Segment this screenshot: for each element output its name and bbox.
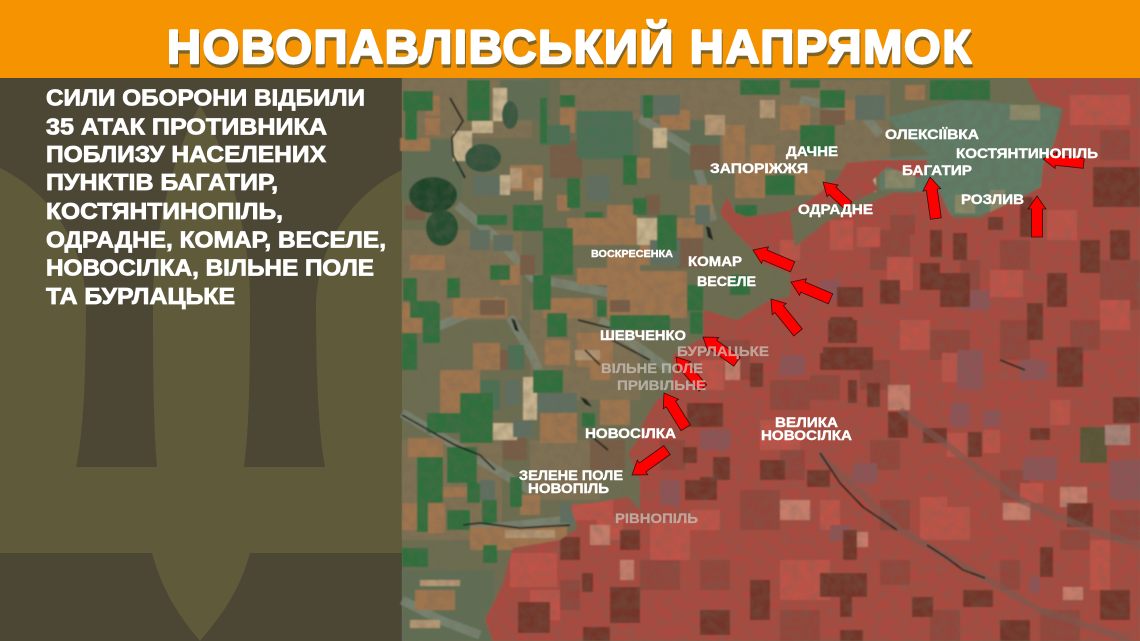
header band <box>0 0 1140 78</box>
icon: trident emblem <box>0 105 402 641</box>
map labels: settlements: КОМАР <box>688 254 742 269</box>
map: Russian-occupied red zone <box>480 78 1140 641</box>
map: rivers and creeks <box>402 98 1025 578</box>
text block: summary: ОДРАДНЕ, КОМАР, ВЕСЕЛЕ, <box>46 226 386 252</box>
title: НОВОПАВЛІВСЬКИЙ НАПРЯМОК <box>167 20 971 73</box>
map labels: settlements: ВЕЛИКА <box>775 415 838 430</box>
text block: summary: 35 АТАК ПРОТИВНИКА <box>46 114 327 140</box>
panel: left text panel with trident emblem <box>0 78 402 641</box>
map labels: greyed settlements: БУРЛАЦЬКЕ <box>677 344 769 359</box>
arrow: Бурлацьке <box>698 330 742 369</box>
map labels: settlements: НОВОСІЛКА <box>585 426 676 441</box>
map labels: settlements: НОВОСІЛКА <box>761 428 852 443</box>
text block: summary: ПУНКТІВ БАГАТИР, <box>46 169 278 195</box>
arrow: Костянтинополь <box>1042 151 1085 171</box>
map labels: settlements: ОЛЕКСІЇВКА <box>885 127 979 142</box>
map: satellite map with frontline <box>400 78 1140 641</box>
arrow: Одрадне <box>818 176 854 212</box>
map labels: greyed settlements: ПРИВІЛЬНЕ <box>617 378 706 393</box>
map labels: settlements: ЗЕЛЕНЕ ПОЛЕ <box>519 468 623 483</box>
map labels: settlements: КОСТЯНТИНОПІЛЬ <box>956 146 1098 161</box>
arrow: Багатир <box>921 176 945 220</box>
text block: summary: НОВОСІЛКА, ВІЛЬНЕ ПОЛЕ <box>46 254 374 280</box>
arrow: Привільне <box>656 388 693 433</box>
arrow: south of Веселе <box>764 293 805 338</box>
text block: summary: КОСТЯНТИНОПІЛЬ, <box>46 198 283 224</box>
arrow: Розлив <box>1028 196 1046 237</box>
map labels: settlements: ЗАПОРІЖЖЯ <box>710 161 808 176</box>
text block: summary: ТА БУРЛАЦЬКЕ <box>46 283 235 309</box>
arrow: Новосілка <box>627 443 672 482</box>
arrow: Вільне Поле <box>670 352 709 393</box>
text block: summary <box>46 84 386 309</box>
map fields: uncontrolled area west and north <box>400 78 1061 641</box>
arrow: Комар <box>749 242 796 275</box>
arrow: Веселе <box>787 274 834 307</box>
map labels: settlements: ОДРАДНЕ <box>798 202 873 217</box>
map labels: settlements: ШЕВЧЕНКО <box>600 328 686 343</box>
map labels: settlements: ВЕСЕЛЕ <box>697 274 756 289</box>
text block: summary: СИЛИ ОБОРОНИ ВІДБИЛИ <box>46 84 365 110</box>
map labels: settlements: НОВОПІЛЬ <box>528 481 609 496</box>
map labels: settlements: БАГАТИР <box>902 163 972 178</box>
text block: summary: ПОБЛИЗУ НАСЕЛЕНИХ <box>46 141 327 167</box>
map labels: settlements: ВОСКРЕСЕНКА <box>591 248 673 260</box>
map labels: settlements: РОЗЛИВ <box>961 192 1024 207</box>
map labels: greyed settlements <box>601 344 769 526</box>
map labels: settlements <box>519 127 1098 496</box>
map labels: settlements: ДАЧНЕ <box>786 144 838 159</box>
map labels: greyed settlements: РІВНОПІЛЬ <box>615 511 698 526</box>
map labels: greyed settlements: ВІЛЬНЕ ПОЛЕ <box>601 361 703 376</box>
